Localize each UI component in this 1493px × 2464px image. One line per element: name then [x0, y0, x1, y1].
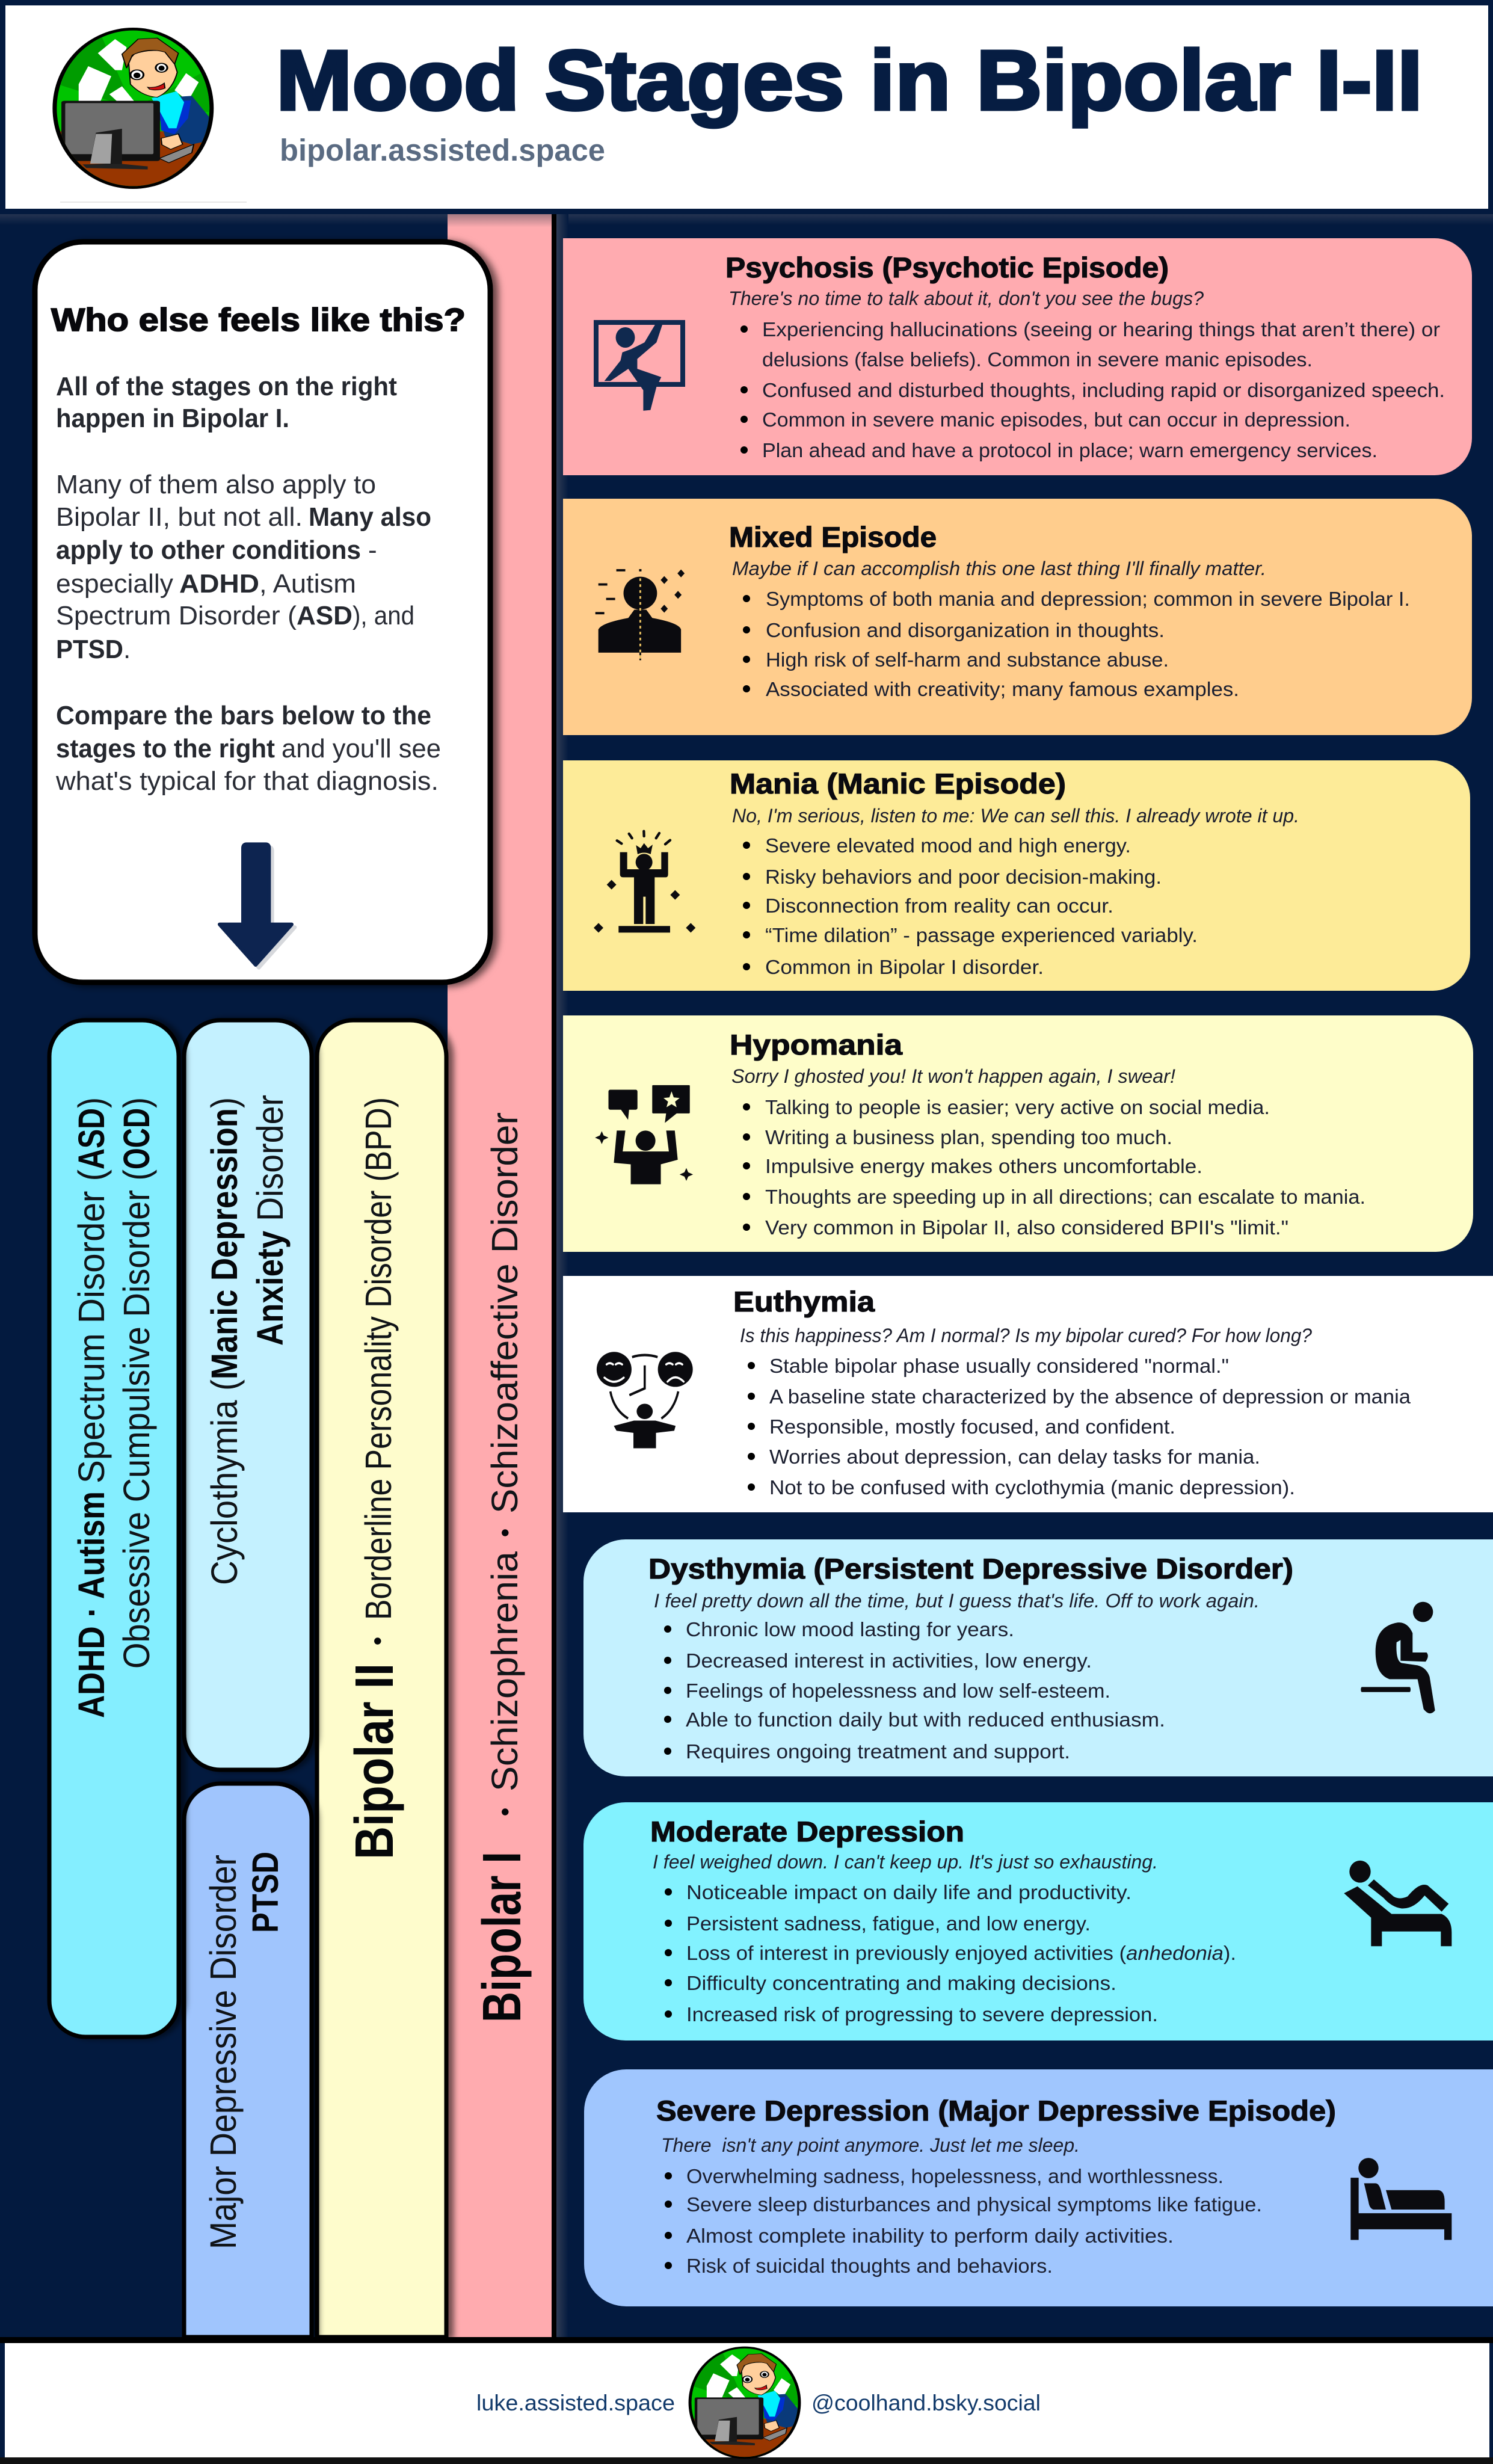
panel: who else feels like this	[35, 242, 490, 982]
text block: other conditions	[56, 470, 431, 664]
bar: Bipolar I and Schizophrenia	[448, 214, 568, 2338]
text block: compare the bars	[55, 701, 441, 796]
list: dysthymia symptoms: Decreased interest in activities, low energy.	[686, 1649, 1092, 1672]
text block: compare the bars: and you'll see	[282, 734, 441, 763]
list: hypomania symptoms: Impulsive energy makes others uncomfortable.	[765, 1155, 1202, 1177]
list: mania symptoms: Disconnection from reality can occur.	[765, 895, 1113, 917]
icon: logo	[50, 26, 219, 191]
list: psychosis symptoms: Confused and disturbed thoughts, including rapid or disorganized speech.	[762, 379, 1445, 401]
title: Mood Stages in Bipolar I-II	[276, 32, 1423, 128]
list: psychosis symptoms: Common in severe manic episodes, but can occur in depression.	[762, 408, 1350, 431]
panel: severe depression	[584, 2069, 1493, 2306]
label: closing paren: )	[116, 1097, 157, 1108]
list: mixed episode symptoms: Confusion and disorganization in thoughts.	[766, 619, 1165, 641]
icon: reclining figure	[1344, 1861, 1451, 1946]
header	[5, 5, 1488, 209]
list: euthymia traits: Worries about depression, can delay tasks for mania.	[769, 1446, 1260, 1468]
list: psychosis symptoms: Experiencing hallucinations (seeing or hearing things that aren’t there) or	[762, 318, 1440, 340]
list: euthymia traits: Stable bipolar phase usually considered "normal."	[769, 1355, 1229, 1377]
list: severe depression symptoms	[665, 2165, 1262, 2277]
panel: mixed episode	[563, 499, 1472, 735]
heading: euthymia: Euthymia	[733, 1286, 875, 1317]
icon: figure balancing two faces	[597, 1352, 693, 1448]
panel: psychosis	[563, 238, 1472, 475]
arrow: pointing down to bars	[220, 844, 295, 968]
heading: mixed episode: Mixed Episode	[729, 521, 937, 553]
panel: dysthymia	[583, 1539, 1493, 1776]
list: dysthymia symptoms: Feelings of hopelessness and low self-esteem.	[686, 1680, 1110, 1702]
list: hypomania symptoms: Writing a business plan, spending too much.	[765, 1126, 1172, 1148]
label: PTSD: PTSD	[245, 1852, 286, 1933]
list: mania symptoms: Risky behaviors and poor decision-making.	[765, 866, 1162, 888]
list: dysthymia symptoms	[664, 1618, 1165, 1763]
quote: moderate depression: I feel weighed down. I can't keep up. It's just so exhausting.	[653, 1851, 1158, 1873]
quote: severe depression: There isn't any point anymore. Just let me sleep.	[661, 2134, 1080, 2156]
heading: psychosis: Psychosis (Psychotic Episode)	[725, 251, 1169, 283]
heading: moderate depression: Moderate Depression	[650, 1816, 964, 1847]
text block: other conditions: PTSD	[56, 635, 123, 664]
quote: dysthymia: I feel pretty down all the time, but I guess that's life. Off to work again.	[654, 1590, 1260, 1612]
text block: other conditions: -	[368, 535, 377, 565]
list: psychosis symptoms: Plan ahead and have a protocol in place; warn emergency services.	[762, 439, 1378, 461]
list: hypomania symptoms: Very common in Bipolar II, also considered BPII's "limit."	[765, 1216, 1288, 1239]
label: ADHD and Autism: ADHD · Autism	[71, 1491, 112, 1718]
list: euthymia traits: Responsible, mostly focused, and confident.	[769, 1415, 1175, 1438]
text block: other conditions: .	[123, 635, 131, 664]
heading: mania: Mania (Manic Episode)	[730, 768, 1066, 799]
label: Disorder: Disorder	[250, 1095, 291, 1221]
label: ASD: ASD	[71, 1108, 112, 1169]
text block: intro	[56, 372, 397, 433]
bar: ADHD, Autism and OCD	[49, 1020, 179, 2037]
list: mixed episode symptoms: Symptoms of both mania and depression; common in severe Bipolar I.	[766, 588, 1410, 610]
label: Borderline Personality Disorder: Borderline Personality Disorder (BPD)	[358, 1097, 399, 1620]
panel: mania	[563, 760, 1470, 991]
label: Cyclothymia: Cyclothymia (	[204, 1379, 245, 1585]
subtitle: bipolar.assisted.space	[280, 133, 605, 167]
list: mania symptoms: “Time dilation” - passage experienced variably.	[765, 924, 1198, 946]
text block: other conditions: Spectrum Disorder (	[56, 601, 297, 630]
footer	[0, 2337, 1493, 2464]
heading: who else: Who else feels like this?	[51, 302, 466, 338]
quote: mania: No, I'm serious, listen to me: We can sell this. I already wrote it up.	[732, 805, 1299, 827]
text block: other conditions: especially	[56, 569, 173, 599]
list: euthymia traits: Not to be confused with cyclothymia (manic depression).	[769, 1476, 1295, 1498]
list: psychosis symptoms: delusions (false beliefs). Common in severe manic episodes.	[762, 348, 1313, 371]
quote: euthymia: Is this happiness? Am I normal? Is my bipolar cured? For how long?	[740, 1325, 1312, 1346]
heading: hypomania: Hypomania	[730, 1029, 903, 1061]
label: closing paren: )	[71, 1097, 112, 1108]
panel: hypomania	[563, 1015, 1473, 1252]
list: severe depression symptoms: Severe sleep disturbances and physical symptoms like fatigue.	[686, 2193, 1262, 2216]
footer link: coolhand.bsky.social: @coolhand.bsky.social	[811, 2391, 1041, 2415]
text block: other conditions: , Autism	[259, 569, 356, 599]
list: severe depression symptoms: Overwhelming sadness, hopelessness, and worthlessness.	[686, 2165, 1224, 2187]
bar: Cyclothymia and Anxiety	[184, 1020, 312, 1770]
list: euthymia traits	[748, 1355, 1411, 1498]
text block: other conditions: ), and	[352, 601, 414, 630]
list: euthymia traits: A baseline state characterized by the absence of depression or mania	[769, 1385, 1411, 1408]
label: Manic Depression: Manic Depression	[204, 1108, 245, 1379]
label: Schizophrenia: Schizophrenia	[484, 1551, 525, 1791]
label: Bipolar II: Bipolar II	[345, 1663, 405, 1859]
list: severe depression symptoms: Almost complete inability to perform daily activities.	[686, 2225, 1174, 2247]
list: moderate depression symptoms: Persistent sadness, fatigue, and low energy.	[686, 1912, 1091, 1935]
bar: Major Depressive Disorder and PTSD	[184, 1784, 312, 2337]
label: first separator dot: •	[492, 1808, 519, 1816]
label: Spectrum Disorder: Spectrum Disorder (	[71, 1169, 112, 1483]
list: hypomania symptoms	[743, 1096, 1365, 1239]
text block: other conditions: apply to other conditions	[56, 535, 361, 565]
list: dysthymia symptoms: Requires ongoing treatment and support.	[686, 1740, 1070, 1763]
list: dysthymia symptoms: Able to function daily but with reduced enthusiasm.	[686, 1708, 1165, 1731]
text block: compare the bars: stages to the right	[56, 734, 275, 763]
list: hypomania symptoms: Talking to people is easier; very active on social media.	[765, 1096, 1270, 1118]
list: hypomania symptoms: Thoughts are speeding up in all directions; can escalate to mania.	[765, 1186, 1365, 1208]
list: moderate depression symptoms: Difficulty concentrating and making decisions.	[686, 1972, 1116, 1994]
list: moderate depression symptoms: Loss of interest in previously enjoyed activities ( anhedonia).	[686, 1942, 1236, 1964]
icon: person climbing through window	[596, 322, 683, 411]
list: severe depression symptoms: Risk of suicidal thoughts and behaviors.	[686, 2255, 1053, 2277]
panel: moderate depression	[583, 1802, 1493, 2040]
text block: compare the bars: Compare the bars below to the	[56, 701, 431, 730]
icon: divided head	[596, 569, 685, 660]
text block: other conditions: Many also	[309, 502, 431, 532]
label: separator dot: •	[492, 1529, 519, 1537]
list: mixed episode symptoms: High risk of self-harm and substance abuse.	[766, 648, 1169, 671]
text block: intro: All of the stages on the right	[56, 372, 397, 401]
heading: severe depression: Severe Depression (Major Depressive Episode)	[656, 2095, 1336, 2127]
icon: figure with speech bubbles	[595, 1085, 693, 1184]
quote: mixed episode: Maybe if I can accomplish this one last thing I'll finally matter.	[732, 558, 1266, 579]
icon: figure in bed	[1350, 2158, 1451, 2240]
heading: dysthymia: Dysthymia (Persistent Depressive Disorder)	[648, 1553, 1293, 1585]
icon: seated hunched figure	[1361, 1602, 1435, 1713]
icon: crowned figure on podium	[594, 831, 695, 932]
list: moderate depression symptoms	[665, 1881, 1236, 2025]
label: Schizoaffective Disorder: Schizoaffective Disorder	[484, 1112, 525, 1514]
text block: intro: happen in Bipolar I.	[56, 404, 289, 433]
list: mania symptoms	[743, 834, 1198, 978]
list: mixed episode symptoms: Associated with creativity; many famous examples.	[766, 678, 1239, 700]
label: Obsessive Cumpulsive Disorder: Obsessive Cumpulsive Disorder (	[116, 1169, 157, 1669]
label: Major Depressive Disorder: Major Depressive Disorder	[203, 1855, 244, 2249]
text block: compare the bars: what's typical for that diagnosis.	[55, 766, 439, 796]
text block: other conditions: Many of them also apply to	[56, 470, 376, 499]
list: mania symptoms: Severe elevated mood and high energy.	[765, 834, 1131, 857]
list: moderate depression symptoms: Noticeable impact on daily life and productivity.	[686, 1881, 1131, 1903]
list: psychosis symptoms	[740, 318, 1445, 461]
icon: footer logo	[686, 2345, 804, 2460]
list: dysthymia symptoms: Chronic low mood lasting for years.	[686, 1618, 1014, 1640]
label: closing paren: )	[204, 1097, 245, 1108]
quote: hypomania: Sorry I ghosted you! It won't happen again, I swear!	[731, 1065, 1175, 1087]
list: mania symptoms: Common in Bipolar I disorder.	[765, 956, 1044, 978]
footer link: luke.assisted.space: luke.assisted.space	[476, 2391, 675, 2415]
list: moderate depression symptoms: Increased risk of progressing to severe depression.	[686, 2003, 1158, 2025]
list: mixed episode symptoms	[743, 588, 1410, 700]
panel: euthymia	[563, 1276, 1493, 1512]
label: Anxiety: Anxiety	[250, 1231, 291, 1346]
label: OCD: OCD	[116, 1108, 157, 1169]
label: Bipolar I: Bipolar I	[472, 1852, 532, 2022]
bar: Bipolar II and BPD	[317, 1020, 446, 2337]
text block: other conditions: ADHD	[179, 569, 259, 599]
text block: other conditions: Bipolar II, but not all.	[56, 502, 303, 532]
quote: psychosis: There's no time to talk about it, don't you see the bugs?	[728, 288, 1204, 309]
text block: other conditions: ASD	[297, 601, 352, 630]
label: separator dot: •	[365, 1637, 391, 1645]
